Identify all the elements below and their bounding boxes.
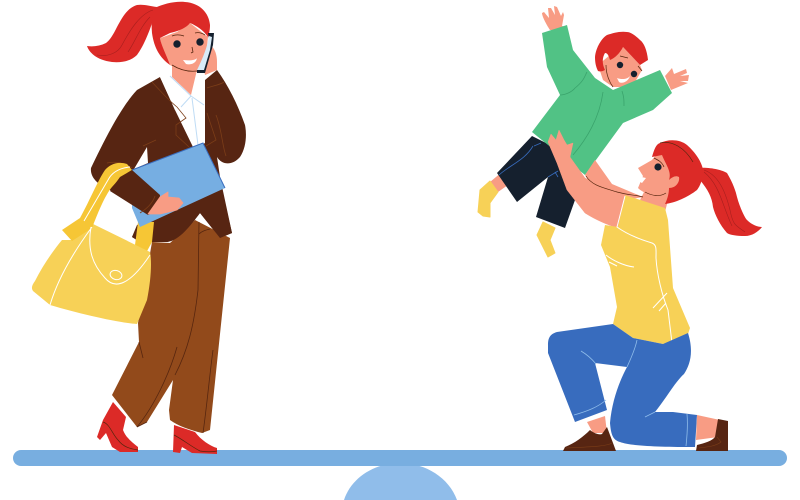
mother front arm	[548, 130, 643, 228]
mother back arm	[585, 160, 643, 200]
figure: kneeling mother	[548, 130, 762, 451]
folder	[132, 143, 225, 227]
figure: working woman	[32, 2, 246, 454]
jeans seams	[574, 340, 687, 446]
trousers	[112, 220, 230, 433]
bag strap and buckle	[62, 163, 132, 241]
mother neck	[640, 190, 668, 212]
child left leg skin	[490, 172, 508, 192]
child hair	[595, 32, 648, 71]
bag seams	[50, 167, 150, 305]
figure: child	[478, 6, 689, 257]
seesaw beam	[13, 450, 787, 466]
smile and eyes	[183, 58, 197, 64]
child hands	[542, 6, 566, 30]
child sweater	[532, 25, 672, 175]
phone hand	[204, 45, 217, 75]
jacket seams	[107, 82, 226, 168]
left shoe	[563, 427, 616, 451]
child sock right	[537, 222, 555, 257]
phone	[197, 33, 214, 73]
child sweater seams	[560, 72, 624, 155]
ponytail	[87, 5, 157, 62]
mother top	[601, 195, 690, 344]
right shoe	[696, 419, 728, 451]
jacket hem over trousers	[132, 190, 232, 242]
mother ponytail	[698, 168, 762, 236]
mother hair	[652, 140, 703, 204]
back ankle	[696, 415, 720, 440]
child face	[598, 47, 642, 87]
hand on folder	[148, 192, 183, 214]
child facial features	[617, 62, 623, 68]
child shorts	[497, 136, 575, 228]
back strap	[135, 222, 154, 253]
neck	[172, 62, 197, 97]
mother jeans	[548, 324, 697, 447]
boots	[97, 402, 138, 452]
shirt	[160, 70, 205, 147]
seesaw pivot	[344, 463, 457, 500]
hair	[152, 2, 210, 65]
child sock left	[478, 181, 498, 217]
trouser seams	[137, 222, 213, 433]
mother eye and smile	[654, 163, 662, 171]
mother face	[638, 150, 680, 204]
handbag	[32, 223, 151, 324]
jacket body and sleeves	[91, 70, 246, 242]
sleeve over folder	[110, 170, 160, 215]
top seams	[606, 196, 672, 343]
front ankle	[587, 416, 607, 433]
face	[160, 23, 208, 72]
